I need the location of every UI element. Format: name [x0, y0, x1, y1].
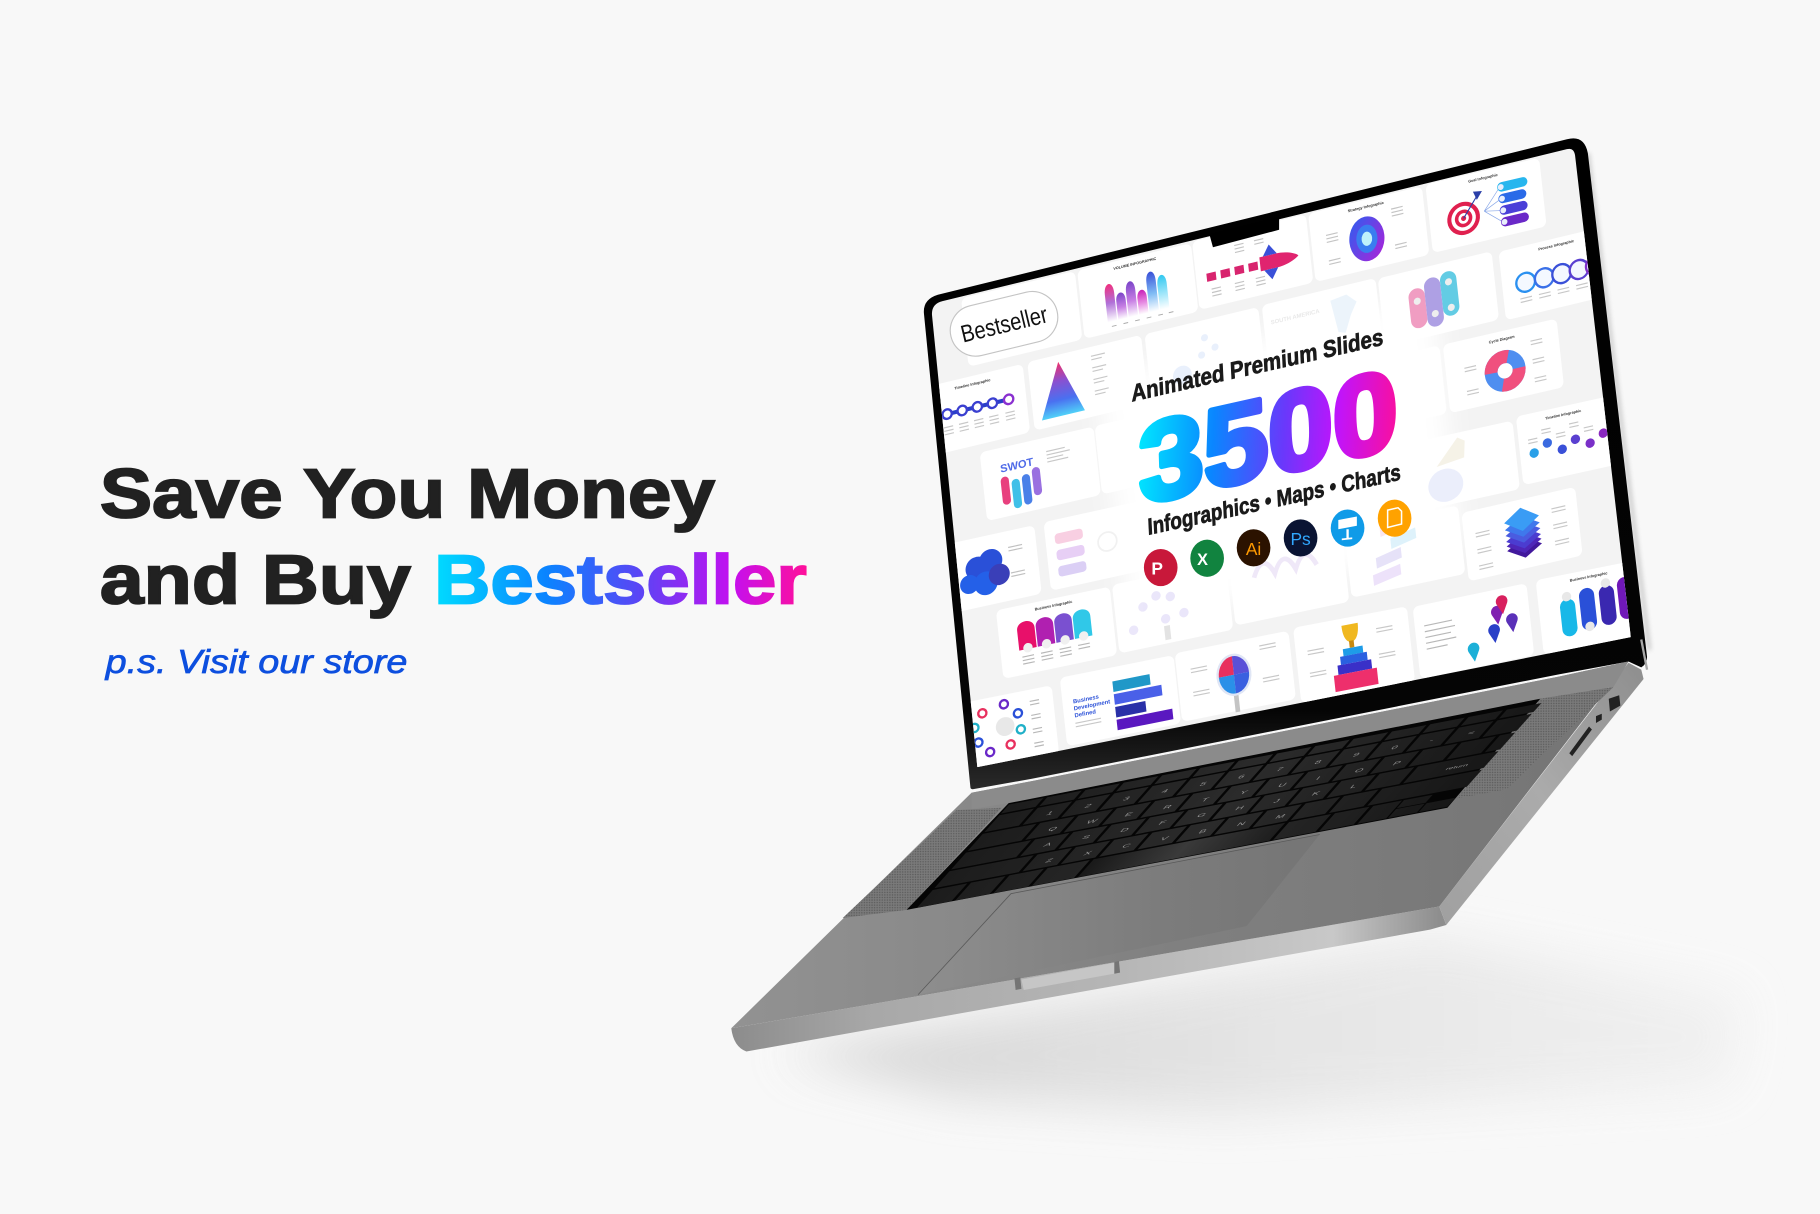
- text blocks: [1075, 718, 1101, 727]
- node two: [957, 405, 967, 416]
- circle two: [1534, 266, 1555, 289]
- bestseller badge: [945, 286, 1063, 361]
- photoshop letters: Ps: [1290, 529, 1311, 549]
- tree trunk: [1164, 625, 1171, 640]
- chain nodes: [942, 394, 1014, 420]
- home row legends: ASDFGHJKL: [1042, 783, 1359, 848]
- card title: Goal Infographic: [1468, 173, 1498, 184]
- card: wave pillars: [1378, 251, 1499, 347]
- circle one: [1515, 271, 1536, 294]
- node four: [987, 397, 998, 409]
- node five: [1585, 437, 1595, 449]
- screen background: [932, 148, 1631, 767]
- ghost card piggy: [1456, 422, 1519, 502]
- piggy body: [1428, 468, 1463, 502]
- purple pill: [1500, 212, 1529, 227]
- nodes: [1528, 425, 1609, 461]
- card body: [1516, 392, 1637, 485]
- card: magnifier: [1175, 631, 1296, 723]
- icon: illustrator: [1237, 529, 1270, 566]
- card: bestseller: [961, 271, 1082, 367]
- excel letter: X: [1197, 551, 1208, 569]
- lid hinge highlight: [1641, 639, 1647, 670]
- layer three: [1504, 518, 1542, 547]
- swot pills: [1000, 466, 1043, 511]
- ghost tree content: [1129, 591, 1188, 640]
- outer ring: [1347, 213, 1387, 265]
- ghost card row four b: [1277, 442, 1398, 535]
- white haze behind headline: [1109, 316, 1450, 594]
- card body: [1413, 583, 1534, 679]
- trackpad outline: [918, 834, 1320, 995]
- ghost card wave: [1234, 577, 1348, 624]
- purple pill: [1616, 575, 1636, 620]
- back lobes: [959, 569, 999, 600]
- teal ring: [1016, 724, 1025, 734]
- circle four: [1569, 258, 1589, 281]
- card: radial circle: [938, 685, 1059, 776]
- outer ring: [1446, 198, 1482, 238]
- cyan pillar: [1439, 269, 1460, 317]
- connector lines: [1482, 187, 1503, 226]
- pale violet button: [1058, 561, 1087, 577]
- cyan pill: [1011, 478, 1023, 509]
- card: timeline: [909, 364, 1030, 460]
- card title: Timeline Infographic: [1545, 409, 1581, 421]
- headline line one: Save You Money: [100, 455, 715, 533]
- lid shadow: [1588, 153, 1649, 650]
- layer four: [1505, 523, 1542, 552]
- card body: [920, 525, 1042, 619]
- node three: [1557, 444, 1567, 455]
- node one: [942, 408, 952, 420]
- second step: [1340, 652, 1368, 665]
- ghost buttons content: [1054, 528, 1118, 576]
- swot title: SWOT: [1000, 456, 1034, 476]
- rocket body: [1259, 248, 1299, 271]
- heading line two: Development: [1074, 699, 1111, 713]
- card title: VOLUME INFOGRAPHIC: [1113, 257, 1157, 271]
- right side wall: [1439, 663, 1644, 925]
- layer two: [1504, 512, 1541, 541]
- pillar nodes: [1412, 278, 1455, 322]
- ghost card row three a: [1096, 427, 1106, 493]
- key rows: [917, 703, 1541, 908]
- card: arches: [996, 587, 1117, 679]
- card body: [1378, 251, 1499, 347]
- keyboard: [907, 699, 1540, 910]
- ghost south america content: [1271, 294, 1356, 332]
- ghost card chevrons: [1350, 537, 1464, 596]
- card body: [909, 364, 1030, 460]
- big number 3500: 3500: [1137, 346, 1399, 529]
- bottom right quarter: [1234, 672, 1251, 693]
- cyan pill: [1559, 597, 1578, 638]
- violet arch: [1053, 612, 1074, 643]
- text blocks: [1325, 206, 1407, 264]
- node two: [1542, 437, 1552, 449]
- white inner ring: [1458, 212, 1469, 225]
- space bar: [1078, 823, 1285, 877]
- ring nodes: [968, 697, 1027, 760]
- card: volume infographic: [1077, 243, 1198, 339]
- arrow: [1461, 191, 1483, 218]
- blue pill: [1578, 587, 1598, 631]
- floor shadow: [780, 938, 1741, 1114]
- brain shape: [957, 545, 1012, 600]
- cup: [1341, 623, 1360, 643]
- bar five: [1145, 271, 1159, 313]
- trackpad surface: [918, 834, 1320, 995]
- pink segment: [1490, 354, 1521, 388]
- circle five: [1585, 254, 1606, 277]
- pale purple chevron: [1372, 564, 1402, 586]
- card body: [1192, 214, 1313, 310]
- cyan arch: [1072, 608, 1092, 639]
- badge text: Bestseller: [958, 302, 1050, 348]
- purple pin: [1490, 605, 1504, 626]
- ghost card row four a: [1161, 469, 1282, 563]
- card: trophy steps: [1293, 606, 1415, 703]
- ports: [1569, 695, 1620, 756]
- arch caps: [1023, 630, 1089, 653]
- card: brain: [920, 525, 1042, 619]
- illustrator disc: [1237, 529, 1270, 566]
- text blocks: [1475, 506, 1570, 570]
- card: pyramid: [1027, 335, 1149, 431]
- card: rocket timeline: [1192, 214, 1313, 310]
- deck: [731, 662, 1628, 1028]
- steps: [1331, 643, 1379, 692]
- magnifier lens: [1214, 650, 1254, 699]
- bar one: [1104, 283, 1117, 323]
- arches: [1016, 608, 1092, 651]
- red ring: [978, 708, 987, 718]
- red ring lower: [1006, 740, 1015, 749]
- bottom left quarter: [1219, 675, 1236, 696]
- trophy: [1341, 623, 1360, 649]
- pillars: [1407, 269, 1461, 332]
- card: goal infographic: [1425, 158, 1547, 253]
- coin ribbon: [1437, 438, 1464, 467]
- white ring: [1450, 203, 1477, 233]
- pills: [1558, 575, 1636, 638]
- ghost card buttons: [1044, 508, 1118, 590]
- rocket trail: [1206, 261, 1258, 282]
- card body: [996, 587, 1117, 679]
- node one: [1529, 447, 1539, 459]
- left speaker grille: [843, 808, 1002, 918]
- center ball: [995, 715, 1015, 738]
- magnifier handle: [1233, 684, 1240, 712]
- top left quarter: [1217, 656, 1234, 678]
- heading line one: Business: [1073, 694, 1100, 706]
- layer one: [1503, 504, 1540, 535]
- number row legends: 1234567890-=: [1045, 729, 1477, 816]
- keynote podium: [1338, 516, 1357, 540]
- card: rainbow pills: [1536, 558, 1658, 655]
- text blocks: [1306, 626, 1396, 677]
- top step: [1343, 645, 1363, 656]
- card body: [980, 426, 1101, 521]
- card title: Business Infographic: [1570, 571, 1608, 583]
- layer stack: [1503, 504, 1543, 562]
- card body: [938, 685, 1059, 776]
- camera notch: [1209, 217, 1279, 247]
- pyramid: [1036, 357, 1085, 421]
- card body: [1536, 558, 1658, 655]
- gradient bell bars: [1104, 268, 1169, 323]
- card body: [1498, 225, 1620, 320]
- node six: [1598, 427, 1608, 439]
- card body: [1060, 655, 1181, 746]
- middle ring: [1355, 222, 1379, 255]
- card body: [1425, 158, 1547, 253]
- card body: [1308, 186, 1429, 282]
- top letter row legends: QWERTYUIOP: [1046, 760, 1403, 832]
- top right quarter: [1232, 653, 1249, 675]
- inner dot: [1361, 231, 1373, 247]
- network nodes: [1173, 334, 1218, 385]
- powerpoint disc: [1144, 549, 1178, 586]
- red ring: [1454, 208, 1473, 229]
- thumb scoop: [1021, 962, 1120, 990]
- pill caps: [1497, 183, 1508, 225]
- front lobes: [964, 547, 1004, 583]
- ghost card row three b: [1209, 372, 1331, 467]
- headline line two: and Buy: [100, 541, 411, 619]
- purple bar: [1117, 709, 1173, 730]
- bar six: [1156, 274, 1169, 310]
- key letters: [994, 724, 1504, 873]
- baseline: [1531, 451, 1620, 470]
- pink arch: [1016, 619, 1037, 651]
- indigo pill: [1499, 200, 1528, 216]
- red pin: [1495, 594, 1509, 615]
- rocket fins: [1262, 243, 1279, 281]
- ghost card row two: [1145, 308, 1260, 358]
- subline: visit store: p.s. Visit our store: [105, 644, 407, 681]
- text blocks: [1208, 239, 1268, 296]
- third step: [1337, 659, 1372, 675]
- map shape: [1330, 294, 1356, 332]
- card body: [1461, 487, 1583, 581]
- icon: photoshop: [1284, 519, 1317, 557]
- excel disc: [1190, 540, 1224, 577]
- keys: [917, 703, 1541, 908]
- right speaker grille: [1457, 687, 1613, 799]
- pale pink chevron: [1380, 526, 1386, 537]
- ghost card south america: [1262, 280, 1378, 330]
- card: swot: [980, 426, 1101, 521]
- bar two: [1115, 291, 1128, 320]
- app icons: [1144, 500, 1411, 586]
- text blocks: [1008, 544, 1025, 576]
- powerpoint letter: P: [1151, 559, 1163, 579]
- pink pillar: [1408, 287, 1428, 330]
- text blocks: [1022, 643, 1090, 664]
- hinge band: [972, 662, 1628, 809]
- headline: [100, 455, 807, 619]
- blue pin: [1488, 623, 1501, 644]
- screen: [932, 148, 1631, 768]
- card: layers: [1461, 487, 1583, 581]
- front edge: [731, 906, 1446, 1052]
- bottom letter row legends: ZXCVBNM: [1044, 813, 1287, 864]
- bar three: [1125, 280, 1138, 318]
- bar four: [1137, 289, 1149, 315]
- blue bar: [1114, 685, 1162, 705]
- infographic scene: [100, 138, 1689, 1122]
- text blocks: [1190, 643, 1279, 696]
- teal pin: [1467, 642, 1481, 663]
- goal pills: [1497, 176, 1532, 227]
- target icon: [1445, 191, 1485, 238]
- teal ring left: [970, 723, 979, 733]
- purple ring lower: [986, 747, 995, 757]
- cyan pill: [1497, 176, 1528, 193]
- trackpad notches: [1014, 961, 1120, 990]
- heading line three: Defined: [1074, 709, 1097, 719]
- card body: [1293, 606, 1415, 703]
- layer six: [1506, 533, 1543, 562]
- pages disc: [1378, 500, 1411, 537]
- donut segments: [1490, 354, 1521, 388]
- pale pink button: [1054, 528, 1083, 545]
- violet pillar: [1423, 276, 1445, 328]
- icon: excel: [1190, 540, 1224, 577]
- map pins: [1463, 592, 1521, 663]
- ghost card tree: [1112, 584, 1232, 652]
- text blocks: [944, 411, 1015, 435]
- pages document: [1388, 508, 1402, 527]
- card body: [1443, 319, 1564, 413]
- node five: [1003, 394, 1014, 405]
- card title: Strategy Infographic: [1348, 201, 1384, 213]
- blue pill: [1021, 473, 1033, 505]
- card: map pins: [1413, 583, 1534, 679]
- violet pin: [1505, 612, 1519, 633]
- text blocks: [1046, 446, 1071, 462]
- slide subheading: infographics maps charts: Infographics • Maps • Charts: [1147, 459, 1401, 540]
- magenta arch: [1035, 616, 1055, 647]
- text blocks: [1527, 419, 1593, 444]
- card: target infographic: [1308, 186, 1429, 282]
- blue pill: [1498, 188, 1527, 204]
- laptop lid: [924, 138, 1647, 789]
- tree nodes: [1129, 591, 1188, 635]
- blue ring lower: [974, 738, 983, 747]
- axis labels: [1112, 312, 1173, 326]
- card: process: [1498, 225, 1620, 320]
- process circles: [1515, 254, 1606, 294]
- pale lilac button: [1056, 544, 1085, 561]
- chain: [947, 399, 1010, 414]
- card heading: [1073, 692, 1111, 719]
- ring chart: [1347, 213, 1387, 265]
- pale cyan chevron: [1390, 527, 1417, 549]
- text blocks: [1030, 700, 1044, 747]
- icon: pages: [1378, 500, 1411, 537]
- laptop base: [731, 662, 1644, 1052]
- blue ring: [1013, 708, 1022, 718]
- pink pill: [1000, 476, 1011, 506]
- gradient word Bestseller: Bestseller: [434, 541, 807, 619]
- pale ring: [1098, 531, 1118, 552]
- card body: [1175, 631, 1296, 722]
- keynote disc: [1331, 510, 1364, 547]
- node four: [1570, 434, 1581, 445]
- badge pill: [945, 286, 1063, 361]
- cyan bar: [1112, 674, 1151, 692]
- ghost card row three c: [1326, 345, 1447, 440]
- node three: [972, 401, 982, 413]
- lens rim: [1214, 650, 1254, 699]
- card: business development: [1060, 655, 1181, 746]
- trackpad: [918, 834, 1320, 995]
- navy bar: [1115, 701, 1146, 717]
- card title: Business Infographic: [1035, 600, 1073, 612]
- ghost chevrons content: [1373, 526, 1416, 586]
- icon: keynote: [1331, 510, 1364, 547]
- illustrator letters: Ai: [1246, 539, 1261, 559]
- text blocks: [1463, 339, 1547, 397]
- bottom step: [1334, 668, 1379, 692]
- purple ring: [999, 699, 1008, 709]
- return key legend: return: [1444, 763, 1470, 771]
- text blocks: [1520, 283, 1588, 303]
- card title: Timeline Infographic: [954, 378, 991, 391]
- stem: [1349, 640, 1354, 648]
- bullseye: [1461, 215, 1466, 222]
- card: timeline two: [1516, 392, 1637, 485]
- blue segment: [1490, 354, 1521, 388]
- stacked bars: [1112, 670, 1173, 730]
- ghost wave content: [1253, 552, 1317, 578]
- card body: [1027, 335, 1149, 431]
- navy pill: [1598, 584, 1617, 626]
- purple pill: [1031, 466, 1043, 496]
- card title: Cycle Diagram: [1489, 335, 1515, 345]
- ghost piggy content: [1428, 438, 1464, 502]
- card: cycle: [1443, 319, 1564, 413]
- ghost cards: [1043, 278, 1520, 653]
- card title: Process Infographic: [1538, 239, 1574, 252]
- map title: SOUTH AMERICA: [1271, 309, 1321, 326]
- icon: powerpoint: [1144, 549, 1178, 586]
- lower lobe: [988, 562, 1011, 587]
- pale violet chevron: [1375, 547, 1402, 569]
- list: [1424, 620, 1457, 649]
- photoshop disc: [1284, 519, 1317, 557]
- card body: [1077, 243, 1198, 339]
- circle three: [1551, 262, 1572, 285]
- pill caps: [1561, 577, 1615, 636]
- layer five: [1506, 528, 1543, 557]
- ghost network content: [1173, 334, 1218, 385]
- text blocks: [1091, 353, 1109, 395]
- slide heading: animated premium slides: Animated Premium Slides: [1131, 324, 1384, 407]
